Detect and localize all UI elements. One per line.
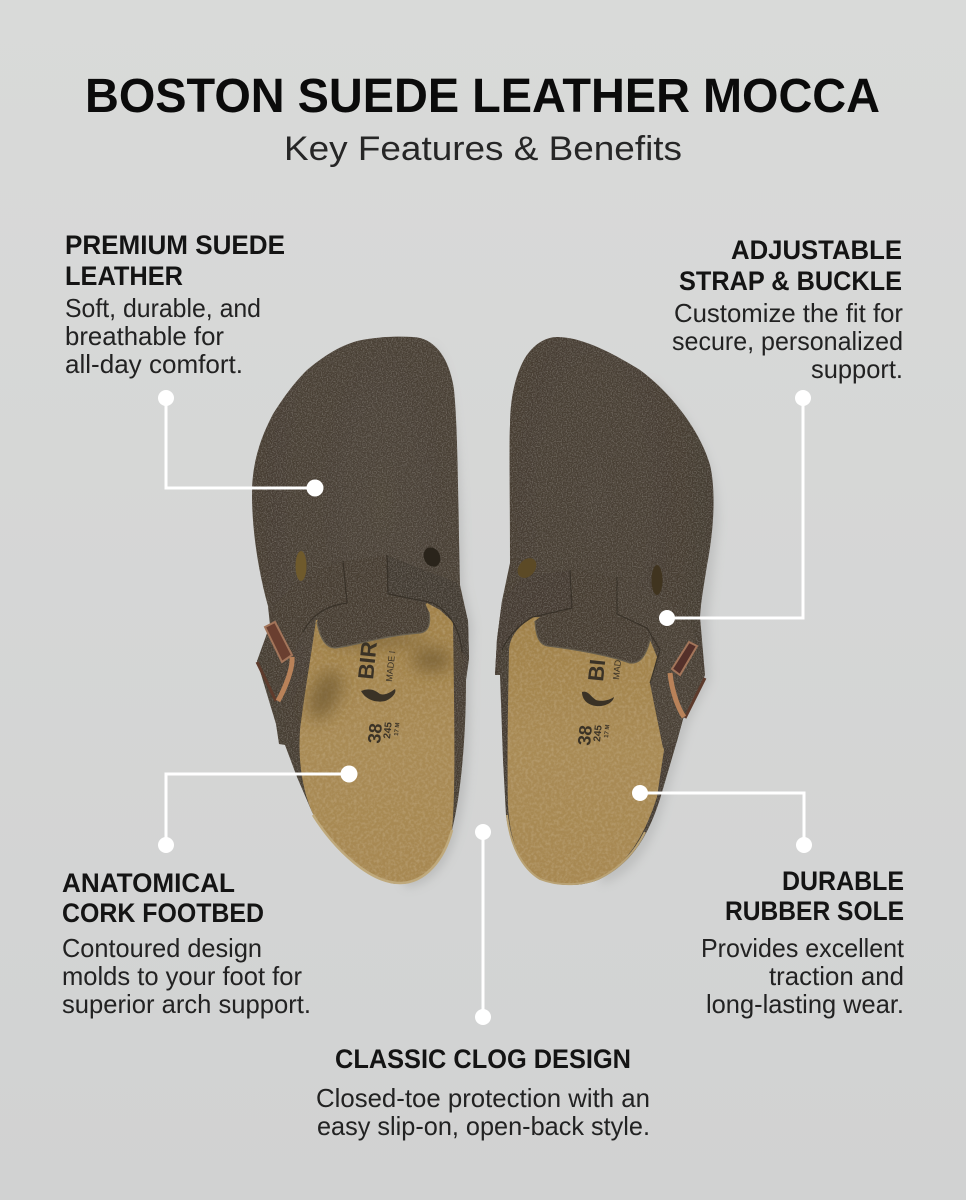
text block: durable rubber sole: long-lasting wear. [706, 989, 904, 1019]
text block: anatomical cork footbed: CORK FOOTBED [62, 898, 264, 928]
text block: anatomical cork footbed: superior arch support. [62, 989, 311, 1019]
left clog footbed stamps: 245 [382, 721, 395, 739]
text block: anatomical cork footbed: ANATOMICAL [62, 868, 235, 898]
right clog footbed stamps: BI [583, 658, 610, 683]
right clog buckle [670, 642, 705, 718]
left clog tongue edge [317, 612, 430, 648]
text block: adjustable strap and buckle: support. [811, 354, 903, 384]
left clog footbed stamps: MADE I [384, 650, 397, 682]
callout connector: clog design [475, 824, 491, 1025]
right clog strap edges [502, 570, 660, 683]
text block: premium suede leather: Soft, durable, and [65, 293, 261, 323]
text block: durable rubber sole: Provides excellent [701, 933, 905, 963]
right clog footbed stamps: 245 [592, 724, 605, 742]
text block: durable rubber sole: traction and [769, 961, 904, 991]
callout connector: adjustable strap [659, 390, 811, 626]
right clog suede upper [495, 337, 714, 885]
callout connector: rubber sole [632, 785, 812, 853]
left clog suede upper [252, 337, 469, 884]
right clog tongue edge [535, 621, 650, 663]
right clog shadow [600, 380, 718, 884]
text block: anatomical cork footbed: molds to your foot for [62, 961, 302, 991]
left clog sole rim [313, 815, 452, 883]
text block: durable rubber sole: DURABLE [782, 866, 904, 896]
text block: adjustable strap and buckle: ADJUSTABLE [731, 235, 902, 265]
right clog footbed stamps: MAD [611, 659, 623, 680]
text block: durable rubber sole: RUBBER SOLE [725, 896, 904, 926]
text block: classic clog design [316, 1044, 650, 1141]
text block: premium suede leather: breathable for [65, 321, 224, 351]
callout connector: premium suede leather [158, 390, 324, 496]
right clog strap hole left [514, 554, 540, 582]
right clog strap hole right [652, 565, 662, 595]
callout connector: cork footbed [158, 766, 358, 853]
left clog foot logo [361, 689, 395, 702]
text block: adjustable strap and buckle: STRAP & BUCKLE [679, 266, 902, 296]
left clog strap hole right [421, 545, 443, 569]
left clog footbed stamps [353, 640, 401, 744]
text block: adjustable strap and buckle: Customize the fit for [674, 298, 903, 328]
right clog [495, 337, 718, 885]
text block: durable rubber sole [701, 866, 905, 1019]
text block: anatomical cork footbed [62, 868, 311, 1019]
left clog straps [273, 561, 347, 662]
right clog footbed stamps: 38 [574, 724, 596, 746]
right clog footbed stamps [574, 658, 623, 746]
text block: premium suede leather: LEATHER [65, 261, 183, 291]
subtitle: Key Features & Benefits [284, 130, 682, 168]
right clog straps [495, 570, 572, 675]
left clog buckle [257, 622, 292, 701]
right clog cork footbed [508, 617, 664, 885]
left clog strap edges [303, 555, 462, 652]
text block: classic clog design: Closed-toe protection with an [316, 1083, 650, 1113]
text block: classic clog design: CLASSIC CLOG DESIGN [335, 1044, 631, 1074]
left clog [252, 337, 472, 887]
left clog footbed stamps: 17 M [394, 722, 401, 736]
right clog foot logo [582, 692, 614, 706]
text block: classic clog design: easy slip-on, open-back style. [317, 1111, 650, 1141]
text block: premium suede leather: PREMIUM SUEDE [65, 230, 285, 260]
text block: premium suede leather [65, 230, 285, 379]
text block: anatomical cork footbed: Contoured design [62, 933, 262, 963]
title: BOSTON SUEDE LEATHER MOCCA [85, 70, 880, 123]
left clog tongue [317, 555, 430, 648]
left clog shadow [400, 345, 472, 887]
text block: premium suede leather: all-day comfort. [65, 349, 243, 379]
left clog strap hole left [296, 551, 306, 581]
left clog footbed stamps: 38 [364, 722, 386, 744]
left clog footbed shading [301, 634, 452, 724]
left clog footbed stamps: BIR [353, 640, 382, 681]
right clog footbed stamps: 17 M [604, 724, 611, 738]
text block: adjustable strap and buckle: secure, personalized [672, 326, 903, 356]
left clog cork footbed [300, 603, 454, 884]
right clog tongue [535, 570, 650, 663]
text block: adjustable strap and buckle [672, 235, 903, 384]
right clog sole rim [507, 815, 645, 884]
